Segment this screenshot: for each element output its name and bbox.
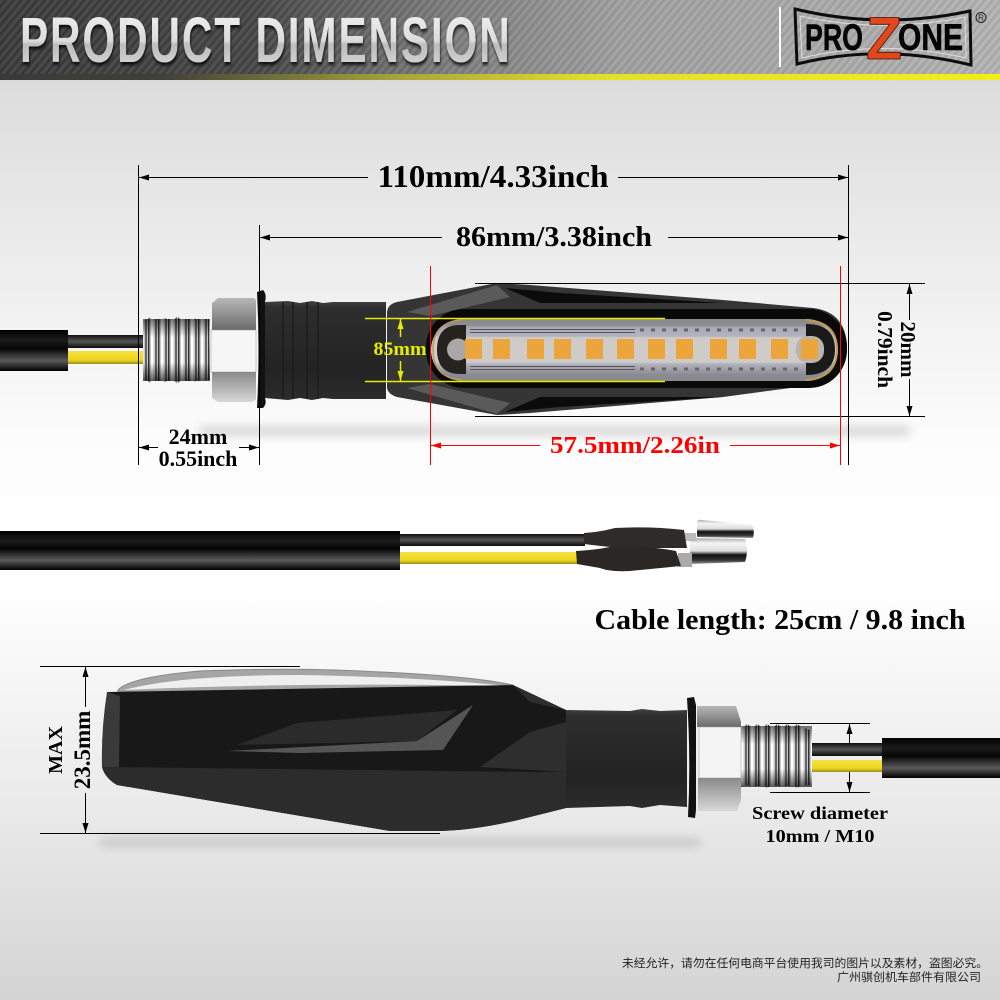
dimension: 20mm body height	[475, 284, 925, 416]
wires	[400, 534, 585, 564]
dimension: max 23.5mm	[40, 666, 440, 834]
dimension: screw diameter: 10mm / M10	[766, 826, 874, 846]
lamp body	[102, 685, 566, 831]
dimension: max 23.5mm: 23.5mm	[70, 711, 95, 789]
body facets	[407, 285, 510, 414]
dimension: 86mm: 86mm/3.38inch	[456, 222, 652, 253]
cable	[812, 738, 1000, 778]
threaded bolt	[143, 317, 210, 383]
body ridge	[227, 705, 473, 753]
connector sleeves	[576, 527, 687, 571]
copyright notice: 广州骐创机车部件有限公司	[837, 970, 981, 984]
copyright notice: 未经允许，请勿在任何电商平台使用我司的图片以及素材，盗图必究。	[622, 956, 988, 970]
dimension: 110mm overall length	[138, 158, 848, 465]
logo: Prozone: Z	[866, 5, 902, 72]
main cable	[0, 531, 400, 570]
dimension: screw diameter: Screw diameter	[752, 803, 888, 823]
title: PRODUCT DIMENSION	[20, 5, 510, 76]
dimension: 20mm body height: 20mm	[896, 322, 920, 378]
threaded bolt	[741, 724, 812, 788]
dimension: 85mm yellow height	[365, 318, 665, 382]
hex nut	[697, 706, 741, 811]
logo: Prozone	[779, 5, 986, 72]
flange washer	[257, 290, 266, 408]
LED lens	[431, 319, 838, 381]
cable	[0, 330, 143, 371]
cable with bullet connectors	[0, 520, 754, 571]
dimension: max 23.5mm: MAX	[45, 726, 67, 774]
dimension: 85mm yellow height: 85mm	[374, 339, 427, 360]
cable length label: Cable length: 25cm / 9.8 inch	[594, 604, 966, 636]
header banner	[0, 0, 1000, 80]
rubber neck	[566, 709, 687, 808]
dimension: 57.5mm red lens length: 57.5mm/2.26in	[550, 433, 720, 459]
dimension: 24mm thread length: 0.55inch	[159, 446, 237, 471]
dimension: 57.5mm red lens length	[430, 266, 840, 465]
left end cap	[437, 325, 466, 374]
shadow under top lamp	[200, 427, 910, 435]
hex nut	[211, 298, 256, 402]
logo: Prozone: ONE	[898, 17, 963, 58]
lens housing	[426, 309, 847, 388]
shadow under bottom lamp	[100, 839, 700, 846]
lens top	[118, 669, 513, 695]
copyright notice	[622, 956, 988, 984]
bottom side-view lamp	[102, 669, 1000, 831]
dimension: 110mm overall length: 110mm/4.33inch	[378, 158, 609, 194]
flange washer	[687, 697, 696, 818]
dimension: 24mm thread length	[139, 424, 259, 471]
dimension: screw diameter	[752, 724, 888, 846]
lamp body	[387, 283, 847, 415]
LED chips	[465, 339, 818, 359]
right end cap	[806, 324, 835, 375]
rubber neck	[265, 301, 386, 400]
dimension: 24mm thread length: 24mm	[169, 424, 227, 449]
bullet terminals	[678, 520, 754, 567]
logo: Prozone: R	[978, 14, 984, 22]
dimension: 20mm body height: 0.79inch	[873, 311, 897, 388]
body lower band	[102, 767, 566, 831]
logo: Prozone: PRO	[805, 17, 863, 58]
top turn signal lamp	[0, 283, 847, 415]
